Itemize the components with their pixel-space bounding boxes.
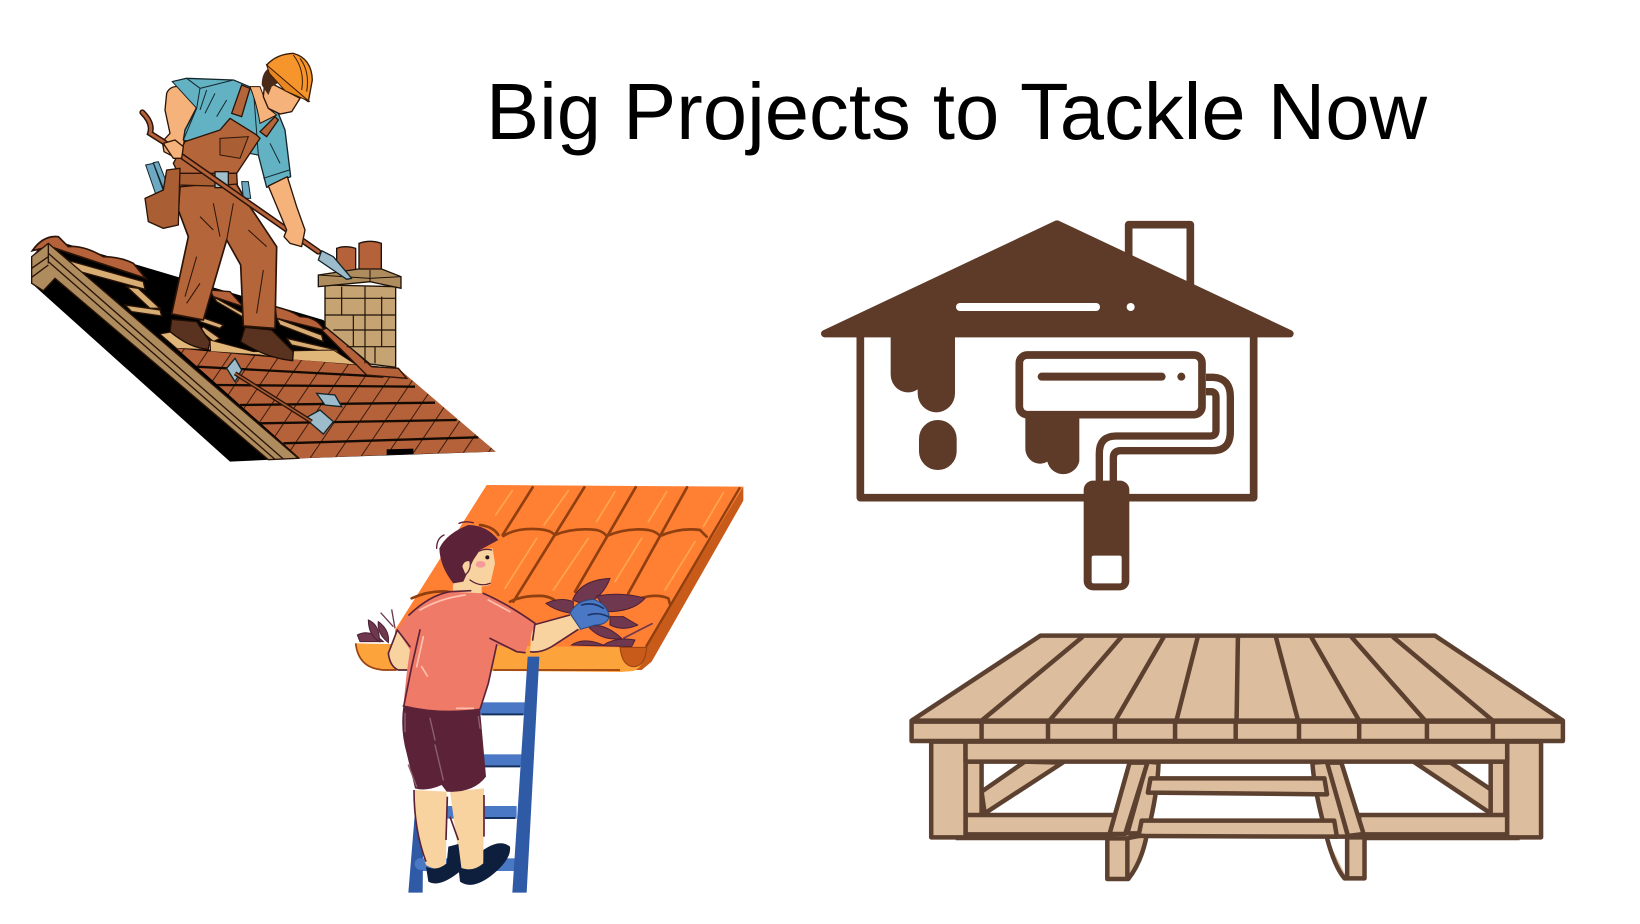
glove [570, 599, 609, 629]
hand on bar [163, 140, 183, 158]
rung undersides [482, 714, 523, 818]
stair steps [1148, 778, 1327, 794]
short posts [966, 762, 982, 817]
roof ridge tiles [32, 237, 146, 278]
scraper head [318, 251, 352, 279]
shingles [167, 343, 500, 460]
right forearm and hand [268, 177, 305, 247]
deck surface [912, 636, 1563, 721]
house walls [860, 333, 1254, 498]
left arm [388, 630, 415, 670]
front right stringer [1327, 763, 1364, 836]
illustration: man cleaning gutter on ladder [356, 485, 743, 893]
boots [170, 319, 293, 361]
bare decking strip [160, 332, 213, 350]
illustration: roofer on roof [32, 53, 500, 462]
roller arm [1113, 377, 1230, 483]
diagonal braces [982, 762, 1063, 813]
chimney [1129, 225, 1190, 287]
trousers [172, 182, 277, 328]
base line [956, 836, 1520, 840]
right rail [512, 657, 539, 893]
back stair stringers [1127, 762, 1159, 833]
face details [476, 561, 486, 568]
right stair foot [1327, 837, 1365, 878]
roller drips [1025, 415, 1079, 474]
left stair foot [1107, 836, 1146, 879]
bib overalls [173, 118, 260, 177]
chimney pots [337, 247, 356, 273]
paint drop [919, 420, 957, 470]
shorts [402, 706, 486, 792]
roof underside shadow [32, 238, 496, 462]
shirt [172, 78, 291, 187]
tile highlights [496, 491, 723, 590]
head [263, 80, 300, 114]
main beam [966, 742, 1507, 762]
tools in belt [146, 162, 251, 202]
helmet [267, 53, 312, 102]
tool pouch [145, 168, 180, 228]
plank lines [982, 637, 1493, 721]
roof [825, 224, 1290, 334]
pry bar [142, 112, 318, 252]
wooden eave edge [32, 243, 298, 460]
legs [414, 790, 447, 869]
left arm [162, 86, 197, 158]
roof side edge [623, 487, 743, 670]
exposed battens [67, 260, 340, 355]
ear [462, 560, 470, 575]
icon: house with paint roller [825, 224, 1290, 590]
gutter [356, 643, 646, 672]
tool belt [178, 173, 237, 186]
paint drips [891, 335, 955, 412]
left rail [408, 812, 423, 893]
leaves on gutter [546, 578, 645, 647]
illustration: wooden deck [912, 636, 1563, 879]
neck and face [453, 548, 495, 594]
rungs [480, 702, 525, 715]
lower rails [966, 815, 1115, 834]
chimney brick stack [325, 285, 396, 367]
front left stringer [1110, 763, 1147, 834]
chimney flashing [322, 327, 407, 378]
chimney [318, 241, 401, 367]
hammer on roof [227, 358, 342, 434]
right arm [530, 615, 580, 653]
tile lines [412, 487, 707, 604]
hair [439, 525, 498, 583]
orange roof [395, 485, 743, 650]
roof highlight [960, 295, 1096, 319]
deck fascia [912, 722, 1563, 741]
title: Big Projects to Tackle Now [486, 67, 1427, 156]
chimney cap [318, 269, 401, 288]
upper tiles near chimney [210, 290, 324, 330]
leaves left [357, 620, 389, 643]
t-shirt [397, 592, 535, 712]
ladder [408, 657, 539, 893]
shoes [426, 844, 462, 883]
roller head [1019, 355, 1202, 415]
roller handle [1084, 481, 1129, 590]
corner posts [931, 742, 966, 837]
neck and collar [250, 87, 277, 123]
